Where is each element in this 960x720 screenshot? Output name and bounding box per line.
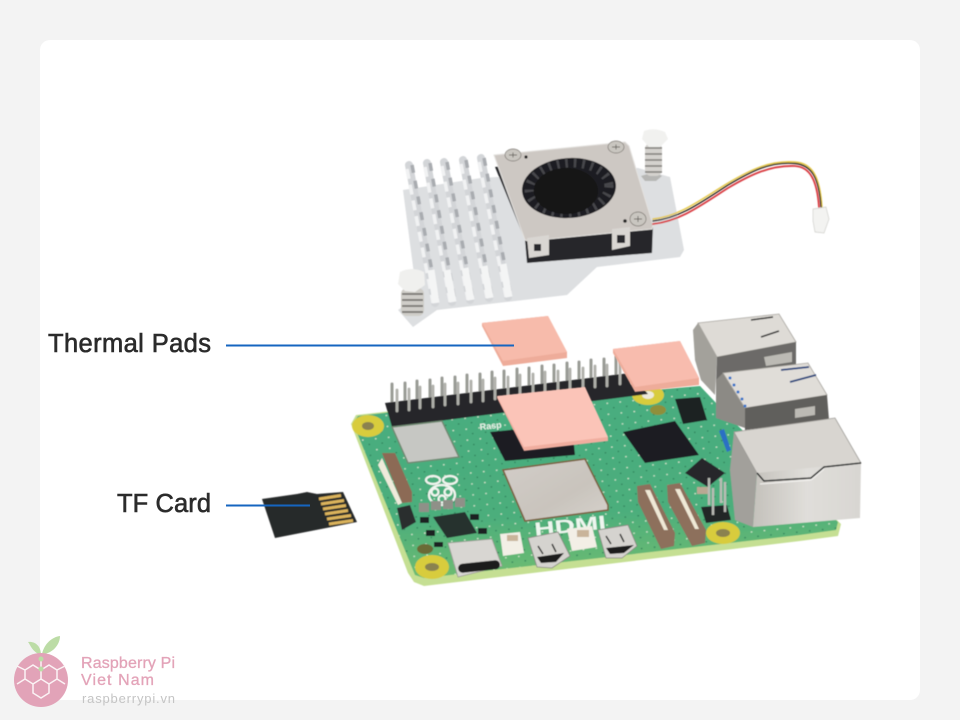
blue connector strip xyxy=(719,429,731,452)
logo text line 2: Viet Nam xyxy=(81,672,154,689)
JST connector 2 xyxy=(567,526,597,551)
silkscreen Raspberry Pi: Rasp xyxy=(479,420,503,432)
board edge xyxy=(351,386,841,586)
TF card xyxy=(262,492,357,538)
RAM chip xyxy=(490,424,575,461)
small crystal xyxy=(697,487,709,494)
FFC connector left xyxy=(637,484,675,549)
GPIO header base xyxy=(385,373,648,427)
spring post right xyxy=(641,129,668,181)
Thermal Pads leader line xyxy=(226,344,514,346)
logo leaves xyxy=(28,636,60,655)
fan screws xyxy=(505,141,646,226)
USB port lower xyxy=(716,363,829,430)
thermal pads xyxy=(482,316,699,451)
board component dots xyxy=(353,386,838,578)
fan hub xyxy=(534,168,598,214)
mounting holes xyxy=(352,385,740,579)
Ethernet jack xyxy=(730,418,861,527)
silkscreen HDMI: HDMI xyxy=(533,513,607,541)
fan wire connector xyxy=(813,207,829,233)
logo raspberry xyxy=(14,653,68,707)
fan mounting tabs xyxy=(527,227,630,258)
GPIO pins front row xyxy=(397,362,632,411)
card contacts xyxy=(319,496,353,524)
SoC metal shield xyxy=(503,459,608,521)
GPIO pins back row xyxy=(392,356,629,409)
fan header xyxy=(701,478,731,523)
thermal pad on SoC xyxy=(497,387,608,451)
fan wire xyxy=(653,162,822,224)
thermal pad upper right xyxy=(613,341,699,392)
fan blades xyxy=(520,155,618,221)
heatsink base plate xyxy=(398,168,684,327)
Raspberry Pi 5 board xyxy=(351,314,861,586)
JST connector 1 xyxy=(500,532,524,556)
Wi-Fi shield xyxy=(392,421,459,463)
TF Card text: TF Card xyxy=(117,490,211,518)
card body xyxy=(262,492,357,538)
heatsink and fan assembly xyxy=(398,129,829,327)
logo: Raspberry Pi Viet Nam xyxy=(14,636,175,707)
raspberry logo xyxy=(426,476,457,505)
FFC connector right xyxy=(667,483,706,546)
QFN chip xyxy=(685,458,725,487)
fan metal cover xyxy=(494,142,653,241)
spring post left xyxy=(398,269,425,316)
board surface xyxy=(353,386,838,578)
heatsink fins xyxy=(407,158,511,303)
thermal pad upper left xyxy=(482,316,567,366)
TF Card leader line xyxy=(226,504,310,506)
power button chip xyxy=(675,397,707,424)
micro HDMI port 2 xyxy=(598,525,637,558)
left side small connector xyxy=(397,505,416,530)
right black chip xyxy=(623,421,699,463)
USB port upper xyxy=(693,314,796,395)
power management chip xyxy=(419,498,487,547)
left FPC connector xyxy=(378,453,412,505)
logo website: raspberrypi.vn xyxy=(82,691,175,706)
fan black housing xyxy=(495,150,653,263)
logo text: Raspberry Pi xyxy=(81,655,175,672)
Thermal Pads text: Thermal Pads xyxy=(48,330,211,358)
micro HDMI port 1 xyxy=(528,532,570,568)
USB-C port xyxy=(448,539,502,577)
